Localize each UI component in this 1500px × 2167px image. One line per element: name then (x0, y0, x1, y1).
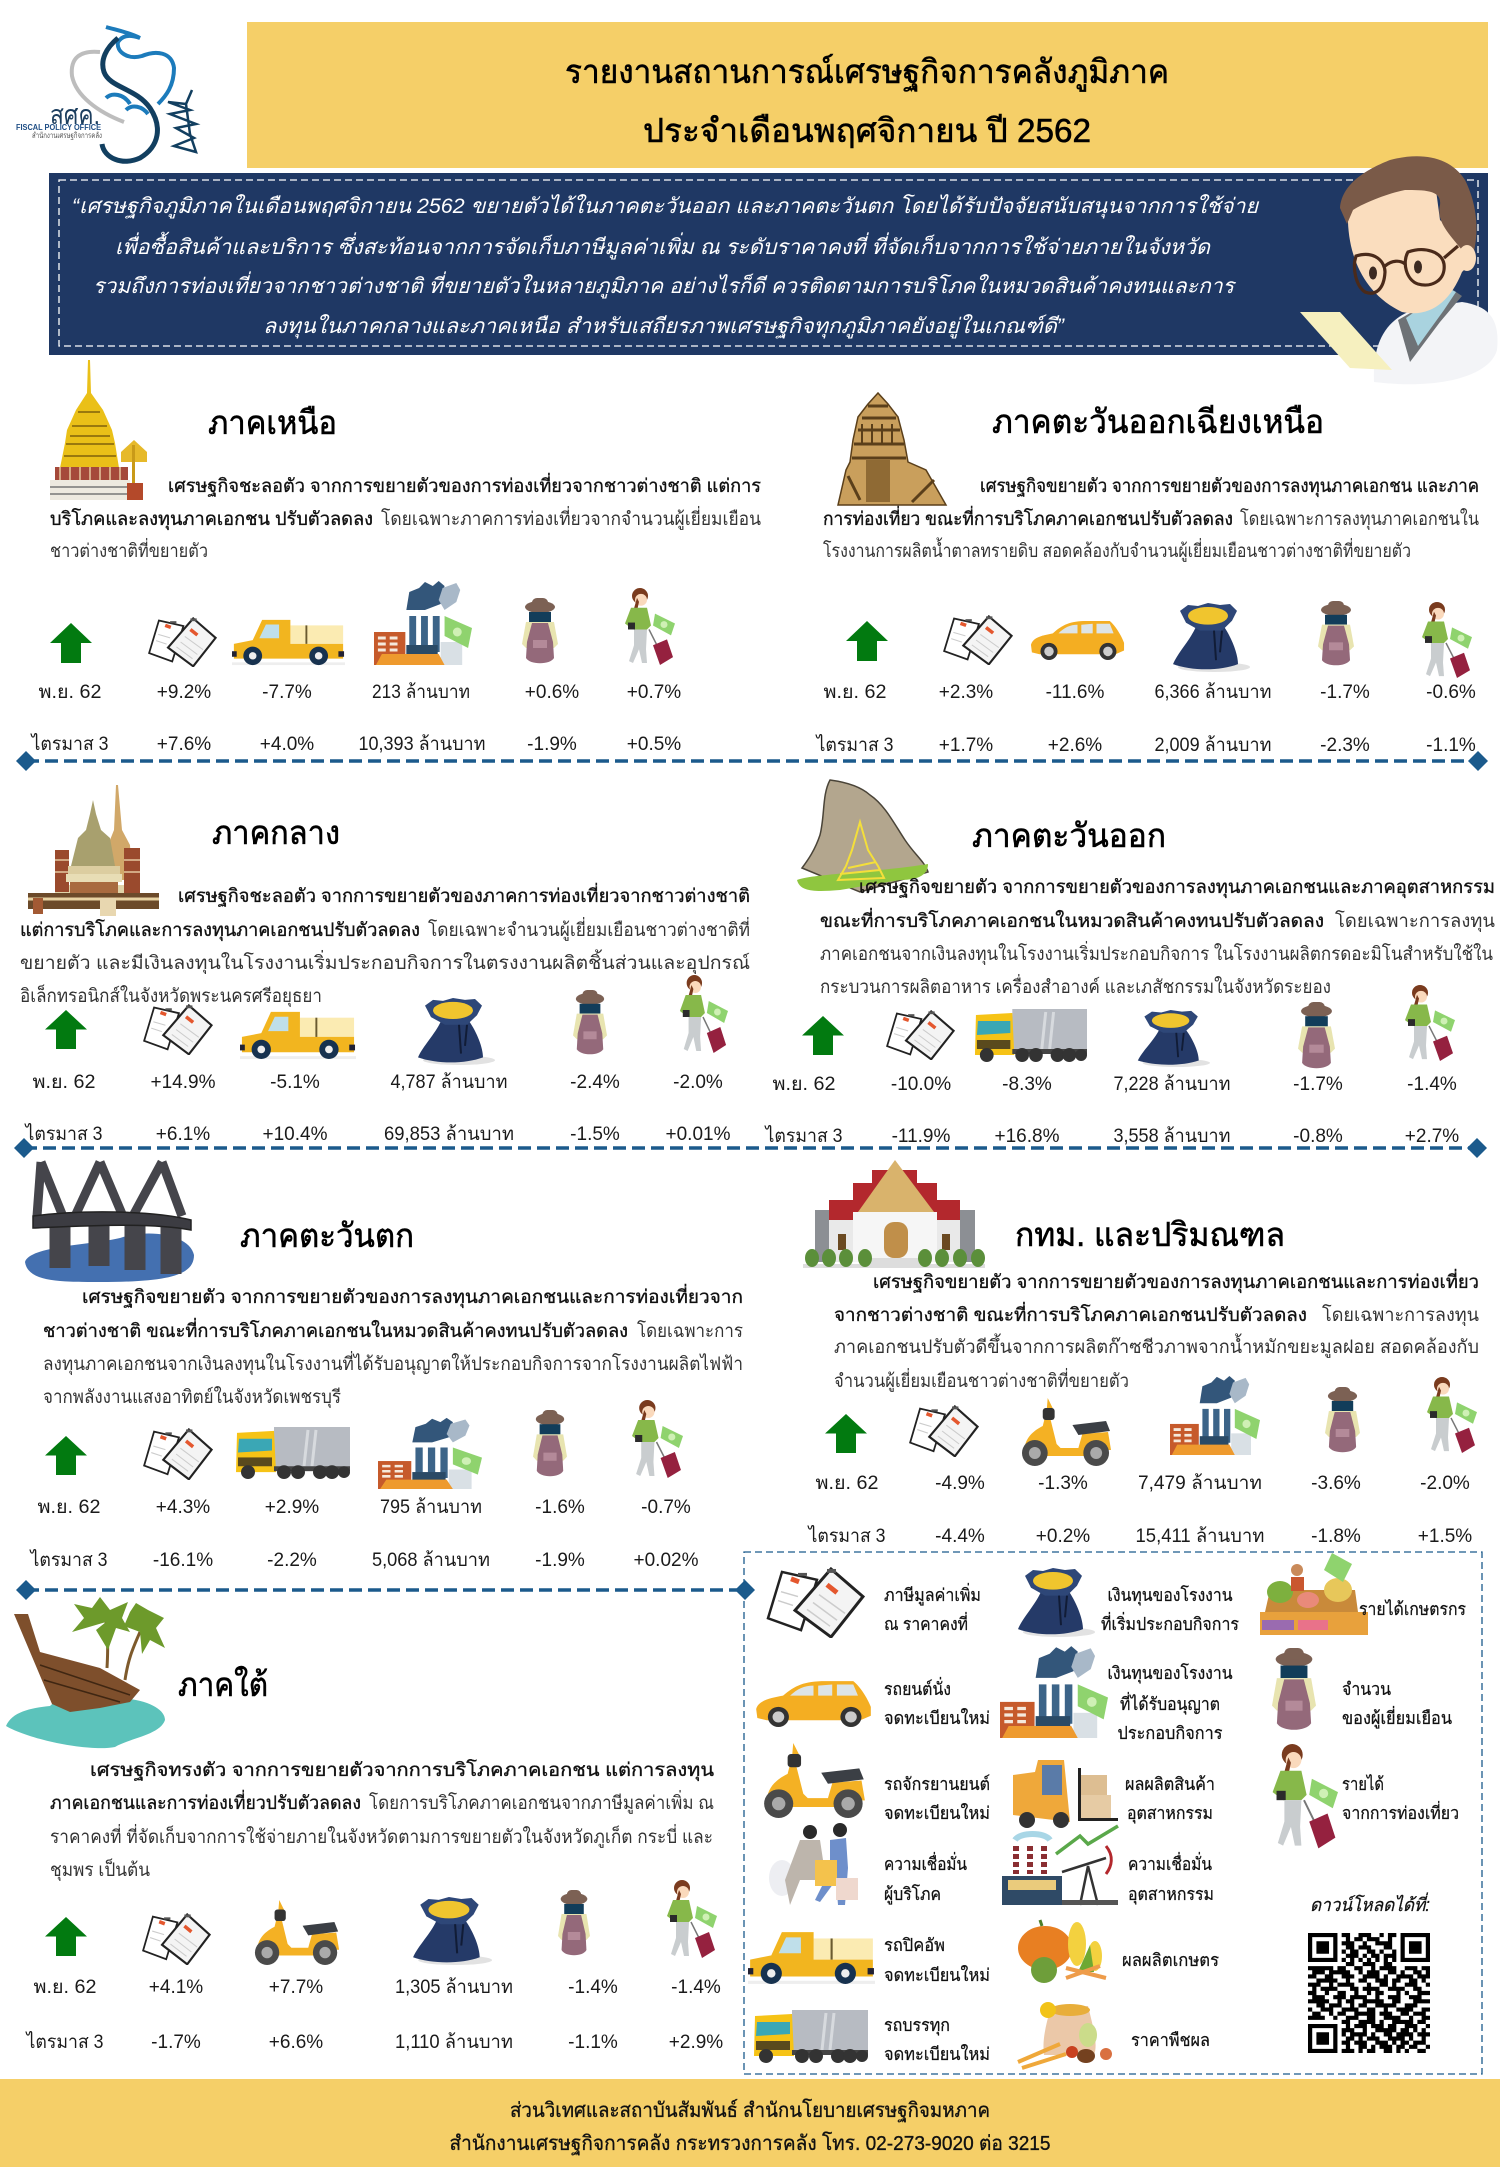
legend: licensed factory capital: ที่ได้รับอนุญาต (1120, 1692, 1220, 1715)
metrics table: West: -0.7% (641, 1497, 691, 1518)
text: Central summary: แต่การบริโภคและการลงทุนภาคเอกชนปรับตัวลดลง (20, 919, 420, 942)
metrics table: Bangkok: -1.8% (1311, 1526, 1361, 1547)
metrics table: South: ไตรมาส 3 (25, 2031, 103, 2053)
metric icons: East (802, 985, 1455, 1068)
icon: golden pagoda (50, 360, 147, 500)
legend: agricultural output: ผลผลิตเกษตร (1122, 1950, 1219, 1970)
legend: new pickups (748, 1932, 990, 1985)
text: Central summary: เศรษฐกิจชะลอตัว จากการขยายตัวของภาคการท่องเที่ยวจากชาวต่างชาติ (178, 883, 750, 907)
metrics table: Central: +0.01% (666, 1124, 731, 1145)
header band (247, 22, 1488, 168)
legend: agricultural output (1018, 1920, 1219, 1983)
metrics table: North: +4.0% (260, 734, 314, 755)
metrics table: West: -1.6% (535, 1497, 585, 1518)
metrics table: North: -1.9% (527, 734, 577, 755)
text: East summary (820, 876, 1495, 997)
legend: number of visitors: ของผู้เยี่ยมเยือน (1342, 1706, 1452, 1729)
legend: business sentiment: ความเชื่อมั่น (1128, 1852, 1212, 1874)
legend: new factory capital (1018, 1568, 1239, 1637)
legend: industrial production (1013, 1760, 1215, 1828)
metrics table: North: +9.2% (157, 682, 211, 703)
legend: crop prices (1018, 2002, 1210, 2068)
text: Bangkok summary: จากชาวต่างชาติ ขณะที่การบริโภคภาคเอกชนปรับตัวลดลง (834, 1302, 1307, 1325)
footer text: ส่วนวิเทศและสถาบันสัมพันธ์ สำนักนโยบายเศรษฐกิจมหภาค (510, 2098, 990, 2122)
legend: business sentiment (1002, 1826, 1214, 1905)
metrics table: East: 3,558 ล้านบาท (1114, 1126, 1230, 1147)
metrics table: Northeast: พ.ย. 62 (824, 682, 886, 703)
text: West summary (43, 1284, 743, 1409)
metrics table: Northeast (815, 682, 1476, 756)
icon: longtail boat and palms (6, 1597, 165, 1748)
logo: Fiscal Policy Office (16, 27, 196, 161)
metrics table: East: -1.7% (1293, 1074, 1343, 1095)
metrics table: North: +0.7% (627, 682, 681, 703)
text: Bangkok summary (834, 1269, 1479, 1392)
metrics table: Bangkok: -1.3% (1038, 1473, 1088, 1494)
text: Central summary: ขยายตัว และมีเงินลงทุนในโรงงานเริ่มประกอบกิจการในตรงงานผลิตชิ้นส่วนและอุปกรณ์ (20, 949, 750, 975)
text: Bangkok summary: ภาคเอกชนปรับตัวดีขึ้นจากการผลิตก๊าซชีวภาพจากน้ำหมักขยะมูลฝอย สอดคล้องกับ (834, 1333, 1479, 1358)
metrics table: North: -7.7% (262, 682, 312, 703)
text: West summary: จากพลังงานแสงอาทิตย์ในจังหวัดเพชรบุรี (43, 1386, 341, 1409)
metrics table: North: +0.5% (627, 734, 681, 755)
legend: new trucks: รถบรรทุก (884, 2015, 950, 2036)
panel: executive summary quote: เพื่อซื้อสินค้าและบริการ ซึ่งสะท้อนจากการจัดเก็บภาษีมูลค่าเพิ่ม ณ ระดับราคาคงที่ ที่จัดเก็บจากการใช้จ่ายภายในจังหวัด (115, 231, 1211, 260)
panel: executive summary quote: ลงทุนในภาคกลางและภาคเหนือ สำหรับเสถียรภาพเศรษฐกิจทุกภูมิภาคยังอยู่ในเกณฑ์ดี” (263, 314, 1065, 339)
QR code (1308, 1933, 1430, 2053)
text: South summary: ภาคเอกชนและการท่องเที่ยวปรับตัวลดลง (50, 1790, 361, 1813)
icon: Victory monument (838, 393, 946, 505)
title (565, 53, 1169, 149)
text: North summary: โดยเฉพาะภาคการท่องเที่ยวจากจำนวนผู้เยี่ยมเยือน (381, 506, 761, 530)
legend: new factory capital: เงินทุนของโรงงาน (1108, 1585, 1233, 1606)
icon: Buddha at Sukhothai (28, 785, 159, 916)
text: South summary: โดยการบริโภคภาคเอกชนจากภาษีมูลค่าเพิ่ม ณ (369, 1790, 714, 1814)
metrics table: Central: -2.0% (673, 1072, 723, 1093)
metrics table: Northeast: -0.6% (1426, 682, 1476, 703)
text: Bangkok summary: โดยเฉพาะการลงทุน (1322, 1304, 1479, 1327)
region: Central (20, 785, 750, 1145)
metrics table: Bangkok (807, 1473, 1472, 1547)
legend: new factory capital: ที่เริ่มประกอบกิจการ (1101, 1612, 1239, 1634)
metrics table: North: 213 ล้านบาท (372, 682, 470, 703)
footer text: สำนักงานเศรษฐกิจการคลัง กระทรวงการคลัง โทร. 02-273-9020 ต่อ 3215 (450, 2131, 1050, 2155)
metrics table: Northeast: +1.7% (939, 735, 993, 756)
logo: Fiscal Policy Office: สศค. (50, 100, 100, 130)
text: East summary: โดยเฉพาะการลงทุน (1335, 910, 1495, 933)
metrics table: West: 5,068 ล้านบาท (372, 1550, 490, 1571)
metrics table: East: -11.9% (892, 1126, 950, 1147)
legend: licensed factory capital: เงินทุนของโรงงาน (1108, 1663, 1233, 1684)
text: Bangkok summary: เศรษฐกิจขยายตัว จากการขยายตัวของการลงทุนภาคเอกชนและการท่องเที่ยว (873, 1269, 1479, 1294)
legend: licensed factory capital: ประกอบกิจการ (1118, 1723, 1222, 1743)
metrics table: South: +7.7% (269, 1977, 323, 1998)
metric icons: Central (45, 975, 728, 1065)
metrics table: Northeast: 6,366 ล้านบาท (1154, 682, 1272, 703)
metric icons: South (45, 1880, 717, 1965)
text: North summary: ชาวต่างชาติที่ขยายตัว (50, 538, 208, 561)
heading: North: ภาคเหนือ (208, 404, 337, 441)
region: East (764, 780, 1495, 1147)
download label: ดาวน์โหลดได้ที่: (1310, 1892, 1430, 1915)
metrics table: Central: ไตรมาส 3 (24, 1123, 102, 1145)
legend: consumer confidence: ผู้บริโภค (884, 1884, 941, 1905)
metric icons: North (50, 581, 675, 666)
metrics table: South: +4.1% (149, 1977, 203, 1998)
text: Central summary (20, 883, 750, 1008)
legend: VAT (768, 1569, 981, 1637)
metrics table: East: -1.4% (1407, 1074, 1457, 1095)
heading: Bangkok and vicinity: กทม. และปริมณฑล (1015, 1216, 1285, 1253)
metrics table: South: -1.4% (671, 1977, 721, 1998)
legend: consumer confidence: ความเชื่อมั่น (884, 1852, 967, 1874)
text: Northeast summary: การท่องเที่ยว ขณะที่การบริโภคภาคเอกชนปรับตัวลดลง (823, 506, 1233, 529)
metrics table: South: -1.4% (568, 1977, 618, 1998)
metrics table: North (30, 682, 681, 755)
metrics table: South: -1.7% (151, 2032, 201, 2053)
text: North summary: บริโภคและลงทุนภาคเอกชน ปรับตัวลดลง (50, 508, 373, 531)
legend: new passenger cars: รถยนต์นั่ง (884, 1677, 951, 1699)
metrics table: Northeast: ไตรมาส 3 (815, 734, 894, 756)
title: รายงานสถานการณ์เศรษฐกิจการคลังภูมิภาค (565, 53, 1169, 92)
metrics table: Bangkok: พ.ย. 62 (816, 1473, 878, 1494)
legend: new passenger cars: จดทะเบียนใหม่ (884, 1708, 990, 1728)
legend: new motorcycles (764, 1743, 990, 1823)
text: West summary: ลงทุนภาคเอกชนจากเงินลงทุนในโรงงานที่ได้รับอนุญาตให้ประกอบกิจการจากโรงงานผลิตไฟฟ้า (43, 1351, 743, 1376)
metrics table: Northeast: 2,009 ล้านบาท (1154, 735, 1272, 756)
metrics table: West: +2.9% (265, 1497, 319, 1518)
heading: East: ภาคตะวันออก (972, 817, 1166, 854)
legend: industrial production: ผลผลิตสินค้า (1125, 1774, 1215, 1794)
legend: new motorcycles: รถจักรยานยนต์ (884, 1774, 990, 1794)
metrics table: West: -1.9% (535, 1550, 585, 1571)
metrics table: West: พ.ย. 62 (38, 1497, 100, 1518)
region: West (25, 1162, 743, 1571)
divider 3 (16, 1580, 755, 1600)
metrics table: South: 1,305 ล้านบาท (395, 1977, 513, 1998)
metrics table: South: พ.ย. 62 (34, 1977, 96, 1998)
metrics table: East (764, 1074, 1459, 1147)
text: West summary: โดยเฉพาะการ (637, 1320, 743, 1341)
region: Northeast (815, 393, 1479, 756)
metrics table: Bangkok: -4.4% (935, 1526, 985, 1547)
text: East summary: กระบวนการผลิตอาหาร เครื่องสำอางค์ และเภสัชกรรมในจังหวัดระยอง (820, 974, 1331, 997)
text: East summary: ขณะที่การบริโภคภาคเอกชนในหมวดสินค้าคงทนปรับตัวลดลง (820, 908, 1324, 931)
metrics table: West: +4.3% (156, 1497, 210, 1518)
legend: business sentiment: อุตสาหกรรม (1128, 1884, 1214, 1905)
logo: Fiscal Policy Office: FISCAL POLICY OFFICE (16, 123, 102, 132)
text: Northeast summary: โรงงานการผลิตน้ำตาลทรายดิบ สอดคล้องกับจำนวนผู้เยี่ยมเยือนชาวต่างชาติที่ขยายตัว (823, 537, 1411, 562)
divider 2 (14, 1138, 1487, 1158)
panel: executive summary quote (49, 173, 1488, 355)
legend: licensed factory capital (1000, 1646, 1233, 1743)
metrics table: East: -0.8% (1293, 1126, 1343, 1147)
heading: Central: ภาคกลาง (212, 814, 340, 851)
metrics table: South: +2.9% (669, 2032, 723, 2053)
metrics table: East: +2.7% (1405, 1126, 1459, 1147)
metrics table: Central: -5.1% (270, 1072, 320, 1093)
metrics table: Central: +10.4% (263, 1124, 328, 1145)
heading: South: ภาคใต้ (178, 1666, 268, 1703)
metrics table: West: -16.1% (153, 1550, 213, 1571)
legend: tourism income (1273, 1744, 1459, 1848)
metrics table: Bangkok: -4.9% (935, 1473, 985, 1494)
metrics table: Bangkok: +0.2% (1036, 1526, 1090, 1547)
legend: new trucks: จดทะเบียนใหม่ (884, 2044, 990, 2064)
metrics table: Central: 69,853 ล้านบาท (384, 1124, 514, 1145)
metrics table: Bangkok: -3.6% (1311, 1473, 1361, 1494)
metrics table: Bangkok: 15,411 ล้านบาท (1136, 1526, 1264, 1547)
text: Central summary: อิเล็กทรอนิกส์ในจังหวัดพระนครศรีอยุธยา (20, 983, 322, 1008)
text: South summary: ชุมพร เป็นต้น (50, 1857, 150, 1882)
region: Bangkok and vicinity (803, 1160, 1479, 1547)
icon: Marble temple (803, 1160, 985, 1268)
metrics table: Central: +14.9% (151, 1072, 216, 1093)
panel: executive summary quote: รวมถึงการท่องเที่ยวจากชาวต่างชาติ ที่ขยายตัวในหลายภูมิภาค อย่างไรก็ดี ควรติดตามการบริโภคในหมวดสินค้าคงทนและการ (93, 271, 1237, 299)
icon: economist character (1300, 156, 1498, 384)
metrics table: East: ไตรมาส 3 (764, 1125, 842, 1147)
text: South summary: เศรษฐกิจทรงตัว จากการขยายตัวจากการบริโภคภาคเอกชน แต่การลงทุน (90, 1759, 714, 1782)
metrics table: South (25, 1977, 723, 2053)
metrics table: Northeast: -11.6% (1046, 682, 1104, 703)
legend: number of visitors: จำนวน (1342, 1679, 1391, 1699)
metrics table: Central: -2.4% (570, 1072, 620, 1093)
text: North summary: เศรษฐกิจชะลอตัว จากการขยายตัวของการท่องเที่ยวจากชาวต่างชาติ แต่การ (168, 473, 761, 497)
legend: farm income: รายได้เกษตรกร (1359, 1599, 1466, 1619)
legend: industrial production: อุตสาหกรรม (1127, 1803, 1213, 1824)
panel: executive summary quote: “เศรษฐกิจภูมิภาคในเดือนพฤศจิกายน 2562 ขยายตัวได้ในภาคตะวันออก และภาคตะวันตก โดยได้รับปัจจัยสนับสนุนจากการใช้จ่าย (72, 194, 1260, 219)
footer band (0, 2079, 1500, 2167)
metrics table: North: 10,393 ล้านบาท (358, 734, 486, 755)
metrics table: West: -2.2% (267, 1550, 317, 1571)
metrics table: Central (24, 1072, 731, 1145)
metrics table: North: พ.ย. 62 (38, 682, 102, 703)
legend: tourism income: รายได้ (1342, 1774, 1384, 1794)
metrics table: East: -10.0% (891, 1074, 951, 1095)
legend: VAT: ณ ราคาคงที่ (884, 1612, 968, 1634)
metrics table: South: 1,110 ล้านบาท (395, 2032, 513, 2053)
metrics table: Central: 4,787 ล้านบาท (390, 1072, 508, 1093)
text: Bangkok summary: จำนวนผู้เยี่ยมเยือนชาวต่างชาติที่ขยายตัว (834, 1368, 1129, 1392)
icon: Khao Chi Chan Buddha cliff (797, 780, 928, 892)
metrics table: North: +0.6% (525, 682, 579, 703)
text: South summary: ราคาคงที่ ที่จัดเก็บจากการใช้จ่ายภายในจังหวัดตามการขยายตัวในจังหวัดภูเก็ต กระบี่ และ (50, 1824, 713, 1848)
legend: crop prices: ราคาพืชผล (1131, 2030, 1210, 2050)
legend: VAT: ภาษีมูลค่าเพิ่ม (884, 1583, 981, 1606)
region: North (30, 360, 761, 755)
text: Central summary: โดยเฉพาะจำนวนผู้เยี่ยมเยือนชาวต่างชาติที่ (428, 917, 750, 941)
metrics table: South: -1.1% (568, 2032, 618, 2053)
text: West summary: ชาวต่างชาติ ขณะที่การบริโภคภาคเอกชนในหมวดสินค้าคงทนปรับตัวลดลง (43, 1318, 628, 1341)
metrics table: Northeast: -2.3% (1320, 735, 1370, 756)
legend: number of visitors (1272, 1648, 1452, 1730)
metric icons: Northeast (846, 601, 1472, 678)
logo: Fiscal Policy Office: สำนักงานเศรษฐกิจการคลัง (32, 131, 102, 140)
metrics table: Northeast: -1.7% (1320, 682, 1370, 703)
metrics table: Central: -1.5% (570, 1124, 620, 1145)
metrics table: West: 795 ล้านบาท (380, 1497, 482, 1518)
metric icons: West (45, 1400, 683, 1489)
legend: new motorcycles: จดทะเบียนใหม่ (884, 1803, 990, 1823)
legend: farm income (1260, 1553, 1466, 1635)
metrics table: West (29, 1497, 699, 1571)
legend: new pickups: รถปิคอัพ (884, 1935, 945, 1955)
legend: new passenger cars (756, 1677, 990, 1728)
legend: new pickups: จดทะเบียนใหม่ (884, 1965, 990, 1985)
metrics table: Central: พ.ย. 62 (32, 1072, 96, 1093)
metrics table: West: ไตรมาส 3 (29, 1549, 107, 1571)
metrics table: North: ไตรมาส 3 (30, 733, 108, 755)
region: South (6, 1597, 723, 2053)
metrics table: Bangkok: +1.5% (1418, 1526, 1472, 1547)
title: ประจำเดือนพฤศจิกายน ปี 2562 (643, 112, 1091, 149)
heading: Northeast: ภาคตะวันออกเฉียงเหนือ (992, 403, 1324, 440)
metrics table: Northeast: -1.1% (1426, 735, 1476, 756)
metrics table: East: -8.3% (1002, 1074, 1052, 1095)
metrics table: Northeast: +2.6% (1048, 735, 1102, 756)
footer text (450, 2098, 1050, 2155)
legend: new trucks (754, 2010, 990, 2064)
metrics table: South: +6.6% (269, 2032, 323, 2053)
text: North summary (50, 473, 761, 561)
metrics table: Bangkok: ไตรมาส 3 (807, 1525, 886, 1547)
heading: West: ภาคตะวันตก (240, 1217, 414, 1254)
metrics table: East: พ.ย. 62 (772, 1074, 836, 1095)
metrics table: North: +7.6% (157, 734, 211, 755)
metrics table: Northeast: +2.3% (939, 682, 993, 703)
metrics table: Bangkok: -2.0% (1420, 1473, 1470, 1494)
metrics table: West: +0.02% (634, 1550, 699, 1571)
text: Northeast summary (823, 475, 1479, 562)
metrics table: Bangkok: 7,479 ล้านบาท (1138, 1473, 1262, 1494)
text: East summary: เศรษฐกิจขยายตัว จากการขยายตัวของการลงทุนภาคเอกชนและภาคอุตสาหกรรม (859, 876, 1495, 899)
metrics table: Central: +6.1% (156, 1124, 210, 1145)
metrics table: East: 7,228 ล้านบาท (1114, 1074, 1230, 1095)
metric icons: Bangkok (825, 1376, 1477, 1466)
divider 1 (16, 751, 1488, 771)
text: South summary (50, 1759, 714, 1882)
legend: tourism income: จากการท่องเที่ยว (1342, 1801, 1459, 1823)
legend: consumer confidence (769, 1823, 967, 1905)
metrics table: East: +16.8% (995, 1126, 1060, 1147)
icon: River Kwai bridge (25, 1162, 194, 1282)
panel: legend (744, 1552, 1482, 2074)
text: West summary: เศรษฐกิจขยายตัว จากการขยายตัวของการลงทุนภาคเอกชนและการท่องเที่ยวจาก (82, 1284, 743, 1309)
